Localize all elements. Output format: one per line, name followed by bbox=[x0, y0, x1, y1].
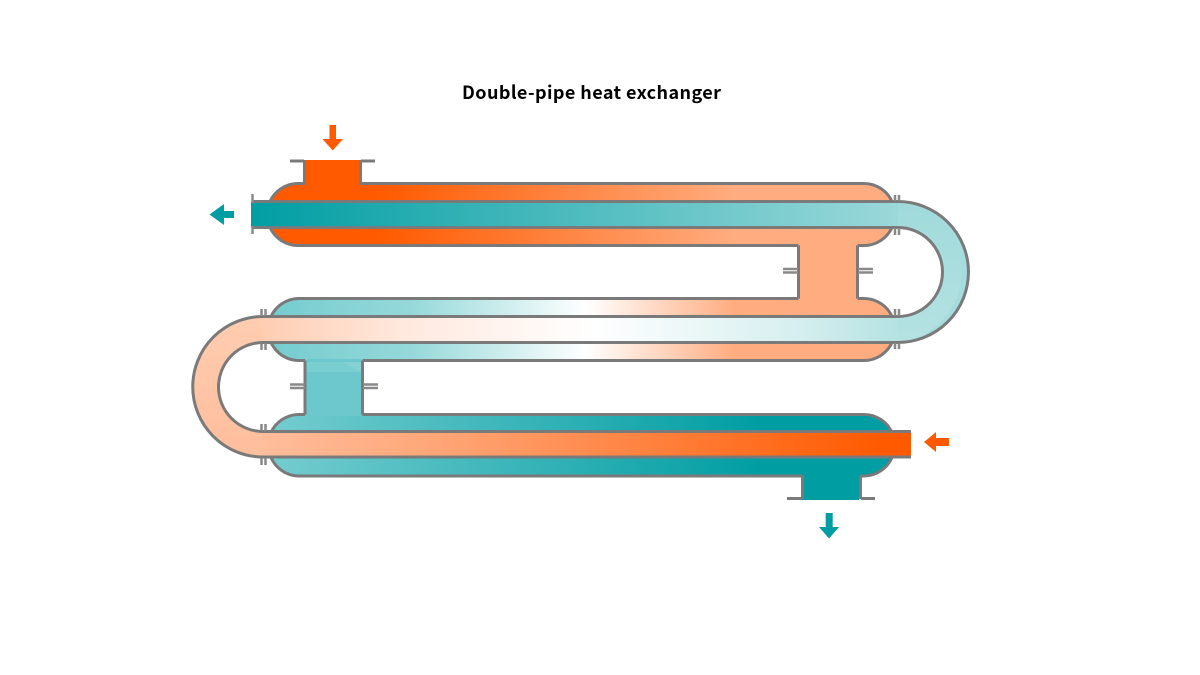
arrow: hot fluid in, top bbox=[322, 125, 343, 150]
arrow: cold fluid out, bottom bbox=[819, 513, 839, 538]
pipe flanges bbox=[262, 195, 899, 465]
outlet flange bottom bbox=[787, 497, 875, 500]
arrow: hot fluid in, right bbox=[924, 432, 949, 452]
inlet flange top bbox=[290, 160, 375, 162]
title: Double-pipe heat exchanger bbox=[462, 79, 721, 105]
connector: right shell link bbox=[783, 244, 873, 300]
middle shell bbox=[271, 298, 892, 360]
top inner pipe with cold outlet and right U-bend bbox=[251, 194, 968, 343]
heat exchanger diagram bbox=[193, 160, 968, 500]
middle inner pipe with left U-bend bbox=[193, 316, 898, 457]
top shell with hot inlet bbox=[270, 160, 892, 246]
bottom inner pipe with hot inlet bbox=[263, 432, 911, 457]
arrow: cold fluid out, left bbox=[210, 204, 234, 225]
bottom shell with cold outlet bbox=[271, 414, 892, 500]
connector: left shell link bbox=[290, 359, 378, 416]
